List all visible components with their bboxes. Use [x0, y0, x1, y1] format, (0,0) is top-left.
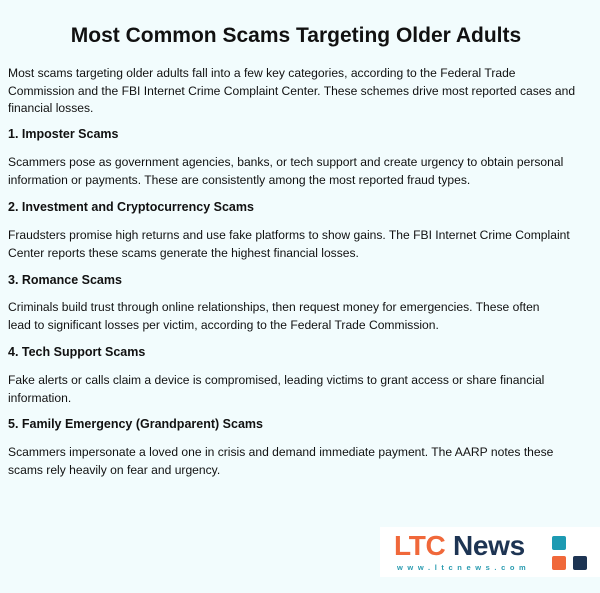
text 5: Scammers impersonate a loved one in crisis and demand immediate payment. The AARP notes these [8, 445, 553, 459]
intro text: Most scams targeting older adults fall into a few key categories, according to the Federal Trade [8, 66, 516, 80]
text 5: scams rely heavily on fear and urgency. [8, 462, 220, 476]
logo: LTC News [380, 527, 600, 577]
text 2: Fraudsters promise high returns and use fake platforms to show gains. The FBI Internet Crime Complaint [8, 228, 570, 242]
text 1: Scammers pose as government agencies, banks, or tech support and create urgency to obtain personal [8, 155, 563, 169]
text 2: Center reports these scams generate the highest financial losses. [8, 246, 359, 260]
intro text: financial losses. [8, 101, 93, 115]
heading 1: 1. Imposter Scams [8, 127, 118, 141]
heading 3: 3. Romance Scams [8, 273, 122, 287]
text 5 [8, 445, 553, 476]
text 3 [8, 300, 540, 332]
text 1 [8, 155, 563, 186]
logo wordmark: LTC News [394, 530, 525, 561]
text 2 [8, 228, 570, 260]
heading 2: 2. Investment and Cryptocurrency Scams [8, 200, 254, 214]
text 4 [8, 373, 544, 404]
logo squares [552, 536, 587, 570]
title: Most Common Scams Targeting Older Adults [71, 24, 521, 47]
text 4: information. [8, 390, 71, 404]
heading 4: 4. Tech Support Scams [8, 345, 145, 359]
text 3: lead to significant losses per victim, according to the Federal Trade Commission. [8, 318, 439, 332]
intro text [8, 66, 575, 115]
heading 5: 5. Family Emergency (Grandparent) Scams [8, 417, 263, 431]
text 3: Criminals build trust through online relationships, then request money for emergencies. These often [8, 300, 540, 314]
intro text: Commission and the FBI Internet Crime Complaint Center. These schemes drive most reported cases and [8, 84, 575, 98]
text 4: Fake alerts or calls claim a device is compromised, leading victims to grant access or share financial [8, 373, 544, 387]
logo url: www.ltcnews.com [397, 563, 530, 572]
text 1: information or payments. These are consistently among the most reported fraud types. [8, 172, 470, 186]
